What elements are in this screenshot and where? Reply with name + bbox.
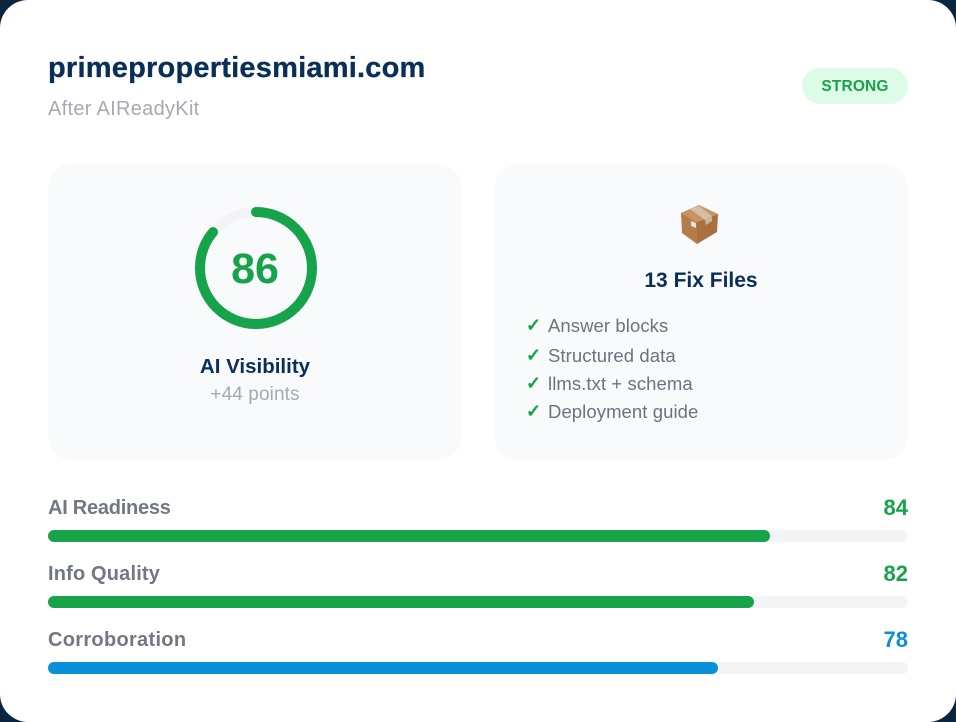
check item: ✓ <box>526 315 541 336</box>
metric label: AI Readiness: AI Readiness <box>48 497 171 519</box>
badge: strong <box>802 68 908 104</box>
badge: strong: STRONG <box>821 78 889 95</box>
panel heading: AI Visibility: AI Visibility <box>200 355 310 378</box>
title: primepropertiesmiami.com <box>48 52 426 84</box>
icon: package <box>681 205 718 244</box>
item: answer blocks: Answer blocks <box>548 315 668 336</box>
item: llms.txt: llms.txt + schema <box>548 373 693 394</box>
metric value: 82: 82 <box>884 561 908 586</box>
checklist <box>526 315 698 422</box>
check item: ✓ <box>526 373 541 394</box>
bar: Info Quality <box>48 596 908 608</box>
metric value: 78: 78 <box>884 627 908 652</box>
panel: AI visibility <box>48 164 462 460</box>
points gained: +44 points <box>210 384 300 405</box>
subtitle: After AIReadyKit <box>48 98 200 120</box>
item: deployment guide: Deployment guide <box>548 401 698 422</box>
item: structured data: Structured data <box>548 345 676 366</box>
metric value: 84: 84 <box>884 495 908 520</box>
panel: fix files <box>494 164 908 460</box>
bar: AI Readiness <box>48 530 908 542</box>
score ring: 86 <box>231 245 279 293</box>
metric label: Info Quality: Info Quality <box>48 563 160 585</box>
heading: 13 Fix Files: 13 Fix Files <box>644 269 758 292</box>
score ring <box>195 207 317 329</box>
bar: Corroboration <box>48 662 908 674</box>
check item: ✓ <box>526 345 541 366</box>
metric label: Corroboration: Corroboration <box>48 629 186 651</box>
check item: ✓ <box>526 401 541 422</box>
